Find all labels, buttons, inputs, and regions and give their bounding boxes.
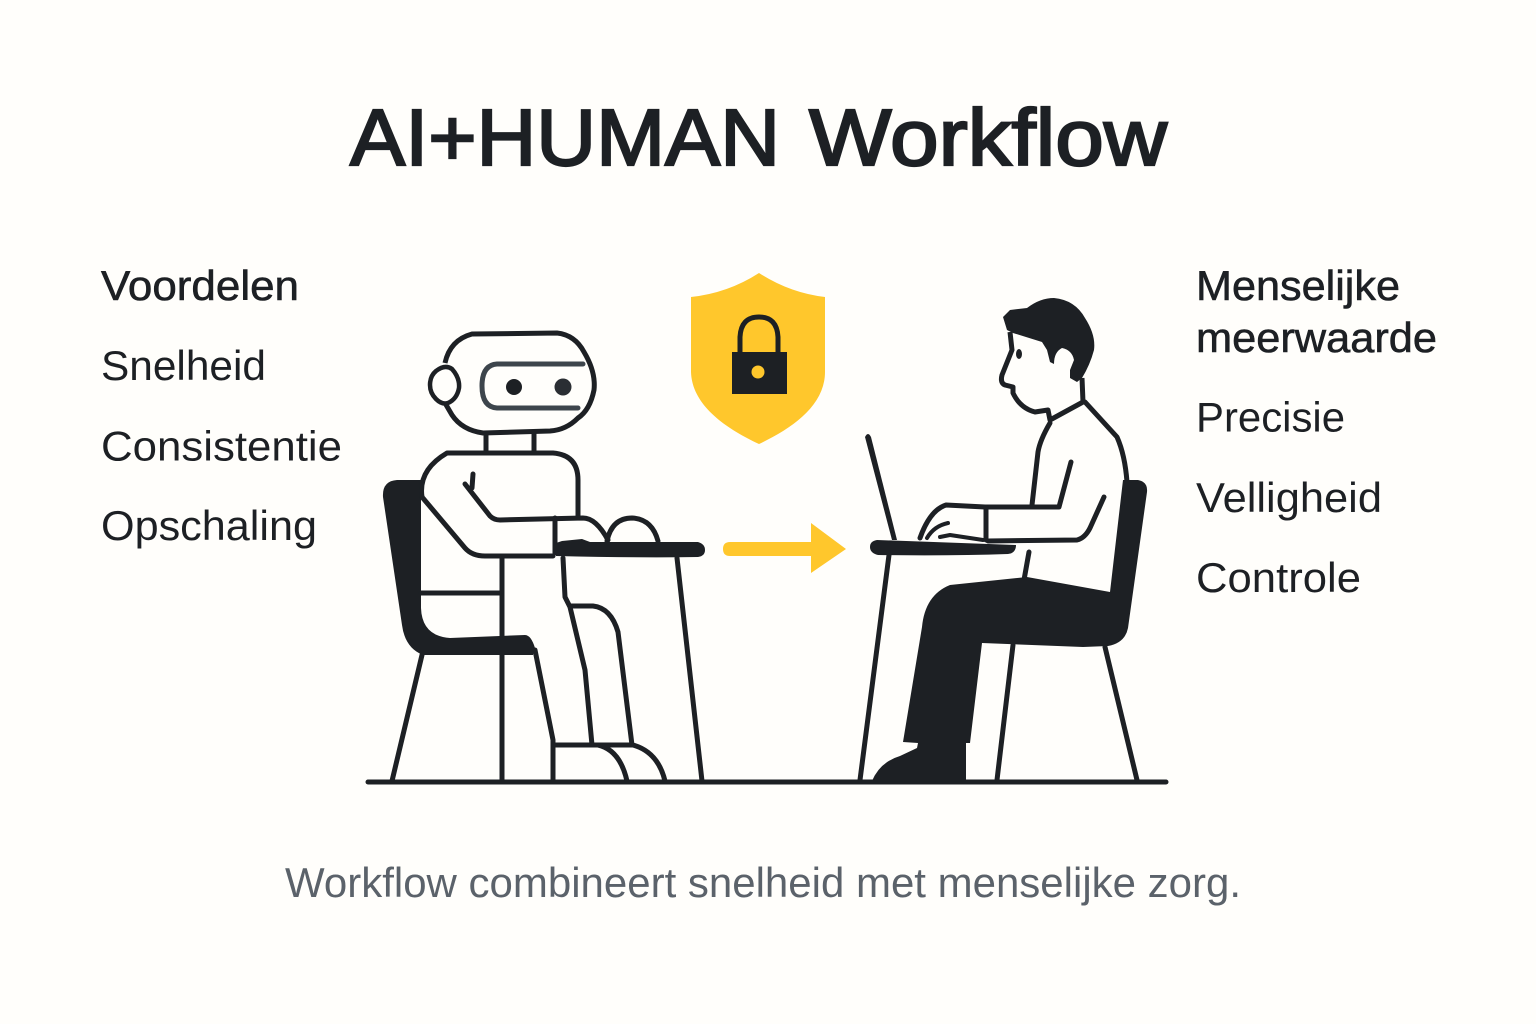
human at laptop	[860, 298, 1147, 782]
icon: padlock	[732, 317, 787, 394]
chair and trousers	[872, 480, 1147, 782]
desk: human	[870, 540, 1016, 555]
human body	[860, 402, 1137, 780]
title: AI+HUMAN	[350, 93, 780, 182]
robot body	[422, 433, 702, 781]
list item: snelheid: Snelheid	[101, 342, 266, 389]
floor line	[368, 780, 1166, 784]
robot at desk	[383, 333, 705, 781]
human head	[1001, 298, 1094, 420]
list item: controle: Controle	[1196, 554, 1361, 601]
desk: robot	[556, 539, 705, 557]
list item: consistentie: Consistentie	[101, 422, 342, 470]
list item: opschaling: Opschaling	[101, 502, 317, 549]
text block: menselijke meerwaarde	[1196, 262, 1437, 601]
icon: shield with padlock	[691, 273, 825, 444]
text block: voordelen	[101, 262, 342, 549]
arrow: robot to human	[723, 523, 846, 573]
caption: Workflow combineert snelheid met menselijke zorg.	[285, 859, 1241, 906]
list item: velligheid: Velligheid	[1196, 474, 1382, 521]
robot head	[430, 333, 594, 433]
heading: menselijke meerwaarde: Menselijke	[1196, 262, 1400, 309]
laptop	[865, 434, 897, 540]
heading: menselijke meerwaarde: meerwaarde	[1196, 314, 1437, 361]
heading: voordelen: Voordelen	[101, 262, 299, 309]
list item: precisie: Precisie	[1196, 394, 1345, 440]
chair: robot	[383, 480, 535, 781]
title: Workflow	[809, 93, 1167, 182]
